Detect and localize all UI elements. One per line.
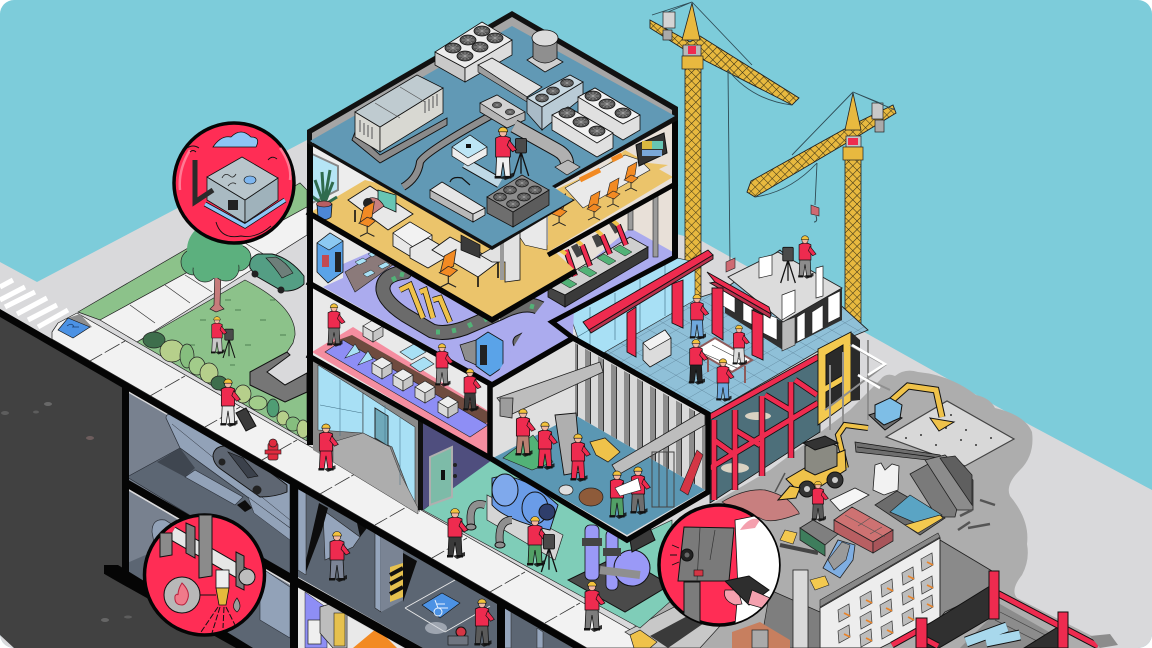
yellow robot arms <box>400 285 450 322</box>
side sidewalk <box>100 207 307 342</box>
accessible parking spot <box>405 580 490 632</box>
surveyor on top slab <box>781 236 816 283</box>
crosswalk <box>0 280 68 327</box>
building: level three wall <box>313 282 492 460</box>
lower concrete block with anchors <box>820 533 992 648</box>
steel pit with pipes <box>892 571 1118 648</box>
blue booth machine <box>317 233 343 283</box>
crane two <box>747 92 896 323</box>
roof: supply duct <box>478 58 542 102</box>
roof: rooftop vent <box>527 30 563 72</box>
lawn surveyor <box>211 317 235 358</box>
dirt work area <box>630 371 1100 648</box>
building: construction interior room <box>490 338 708 538</box>
pedestrians on sidewalk <box>447 508 605 632</box>
roof: main grey duct <box>514 126 567 166</box>
building: roof parapet <box>307 11 678 250</box>
basement far room <box>503 606 573 648</box>
concrete pad <box>886 401 1014 466</box>
curb ramp <box>58 314 92 338</box>
pink floor workers <box>435 344 481 412</box>
callout circle: fire sprinkler <box>144 515 264 635</box>
building: yellow office floor <box>311 180 575 318</box>
bushes <box>143 332 309 438</box>
building: purple factory floor <box>313 217 575 382</box>
grass strip <box>78 183 307 320</box>
deck equipment box <box>643 330 671 367</box>
desks <box>348 186 413 230</box>
building: office wall <box>310 140 500 320</box>
red dirt pile <box>722 490 799 521</box>
callout circle: cloud connected sensor <box>174 123 294 243</box>
roof: duct base plate <box>555 160 580 175</box>
lobby worker <box>318 424 338 472</box>
worker with mower <box>220 379 256 431</box>
building: pink production floor <box>312 320 490 457</box>
backhoe loader <box>775 425 868 500</box>
ground plane <box>0 140 1152 648</box>
building: motor units <box>466 474 563 560</box>
roof: generator on skid <box>352 75 447 163</box>
basement parking room <box>298 489 497 648</box>
upper production supervisor <box>327 304 345 347</box>
floor scrubber <box>425 622 468 645</box>
basement level A <box>127 392 290 580</box>
glass curtain wall <box>570 258 695 355</box>
plant room technician and scanner <box>527 516 557 572</box>
building: right factory bay <box>492 185 677 382</box>
conveyor belt <box>383 272 546 342</box>
scattered debris <box>958 500 995 530</box>
crane one <box>650 2 799 312</box>
roof: surveyor with scanner <box>495 127 529 180</box>
building: right office room <box>548 114 677 256</box>
potted plant <box>310 170 337 220</box>
construction tile floor <box>578 250 868 415</box>
roof: fan condensing unit top <box>435 22 512 82</box>
material piles <box>830 442 973 535</box>
site worker <box>812 481 828 522</box>
building: purple pump units <box>568 525 670 612</box>
asphalt road <box>0 312 240 648</box>
driveway ramp box <box>250 352 307 402</box>
roof: white condenser banks <box>552 88 640 157</box>
laptop station <box>345 248 397 292</box>
lawn <box>137 280 307 441</box>
callout circle: handheld scanner <box>659 505 785 640</box>
roof: small air handler <box>480 95 525 128</box>
fire hydrant <box>265 439 281 460</box>
building: structural floor lines <box>307 108 708 540</box>
pit wall and column <box>625 570 820 648</box>
excavator <box>869 386 954 431</box>
building: teal plant room floor <box>423 460 672 628</box>
concrete top slab and columns <box>723 252 842 351</box>
black basement structure <box>0 309 587 648</box>
roof: skylight and light duct <box>452 135 500 183</box>
building: office furniture <box>310 170 547 287</box>
roof: blue condensers <box>527 75 583 130</box>
brick stack <box>834 507 893 553</box>
deck workers with drawing table <box>689 294 752 402</box>
roof: long grey control box <box>430 178 485 222</box>
pallets and bin <box>780 520 855 590</box>
red steel beams on deck <box>583 250 771 360</box>
parked car <box>250 254 304 294</box>
roof: flexible duct <box>403 116 490 187</box>
parked sedan on ramp <box>213 446 287 497</box>
red steel frame wall <box>710 353 820 503</box>
mechanical room below <box>298 588 403 648</box>
yellow elevator shaft with scaffolding <box>818 332 890 430</box>
basement workers <box>329 532 494 647</box>
basement level B <box>127 490 290 648</box>
building: roof deck <box>310 26 675 246</box>
building: lobby <box>313 360 423 514</box>
roof: dark rooftop unit <box>487 175 549 227</box>
building: dark service room with elevator <box>420 418 492 510</box>
blue kiosk <box>460 332 503 376</box>
main sidewalk <box>52 313 662 648</box>
tree <box>181 222 251 312</box>
